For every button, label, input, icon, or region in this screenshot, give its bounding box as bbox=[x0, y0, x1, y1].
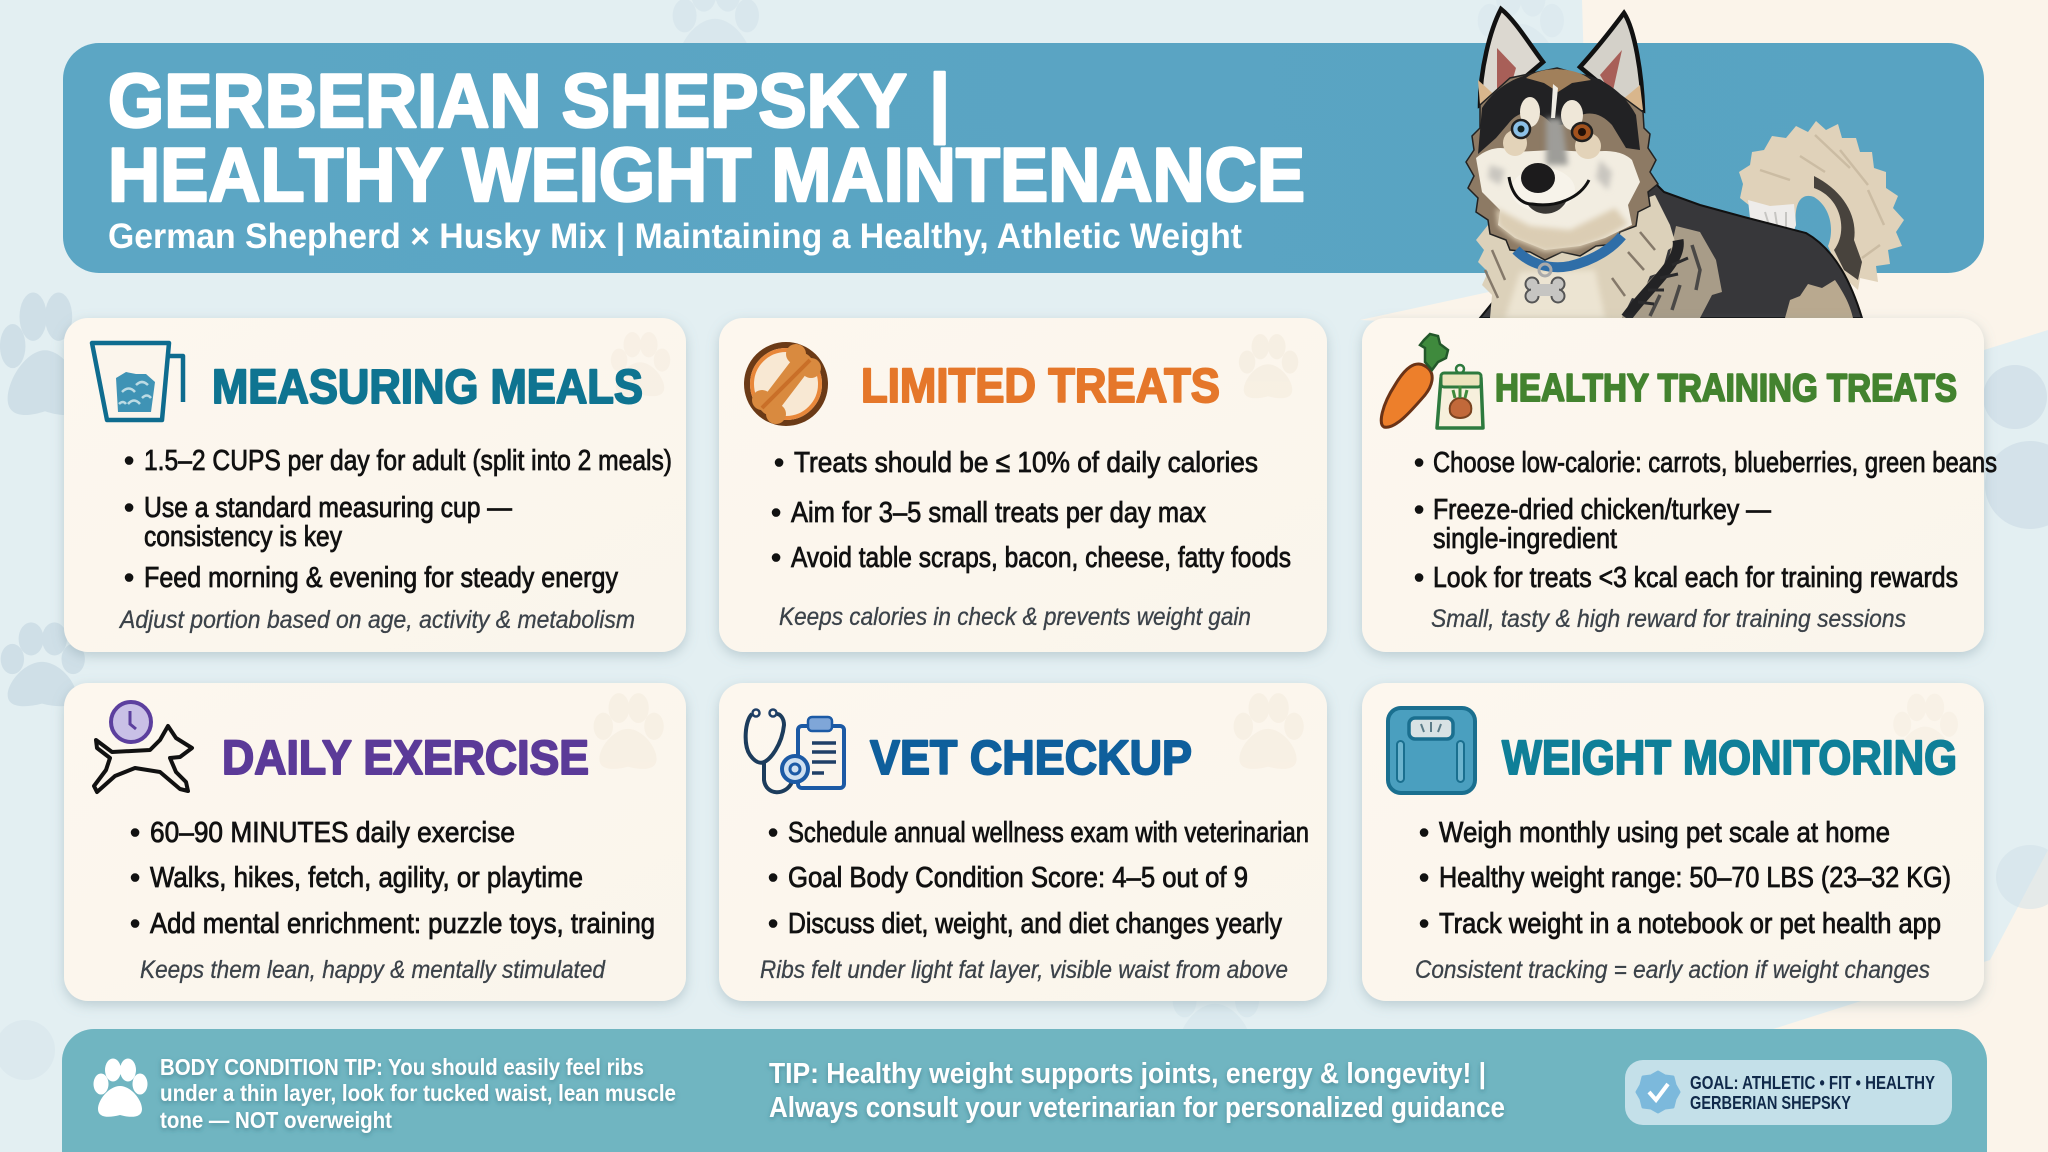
note: Ribs felt under light fat layer, visible waist from above bbox=[760, 956, 1288, 984]
bullet list: 60–90 MINUTES daily exercise bbox=[150, 817, 515, 849]
bullet list: • bbox=[1414, 447, 1424, 479]
bullet list bbox=[768, 817, 1309, 940]
bullet list: • bbox=[774, 447, 784, 479]
bullet list: Avoid table scraps, bacon, cheese, fatty foods bbox=[791, 542, 1291, 574]
note: Small, tasty & high reward for training sessions bbox=[1431, 605, 1906, 633]
bullet list: • bbox=[768, 908, 778, 940]
bullet list bbox=[771, 447, 1291, 574]
bullet list bbox=[1419, 817, 1951, 940]
body condition tip bbox=[160, 1054, 676, 1133]
bullet list: Track weight in a notebook or pet health app bbox=[1439, 908, 1941, 940]
icon: measuring cup bbox=[92, 343, 183, 420]
bullet list: Aim for 3–5 small treats per day max bbox=[791, 497, 1206, 529]
icon: white paw bbox=[94, 1058, 148, 1117]
heading: WEIGHT MONITORING bbox=[1502, 732, 1957, 785]
body condition tip: under a thin layer, look for tucked waist, lean muscle bbox=[160, 1080, 676, 1106]
subtitle: German Shepherd × Husky Mix | Maintaining a Healthy, Athletic Weight bbox=[108, 217, 1242, 256]
bullet list: • bbox=[1414, 562, 1424, 594]
bullet list bbox=[124, 445, 672, 594]
bullet list: • bbox=[1414, 494, 1424, 526]
main title: HEALTHY WEIGHT MAINTENANCE bbox=[108, 133, 1305, 218]
collar and tag bbox=[1516, 236, 1622, 302]
body condition tip: tone — NOT overweight bbox=[160, 1107, 392, 1133]
bullet list: Walks, hikes, fetch, agility, or playtime bbox=[150, 862, 583, 894]
bullet list: • bbox=[124, 492, 134, 524]
bullet list: • bbox=[1419, 908, 1429, 940]
icon: check seal bbox=[1637, 1072, 1679, 1112]
note: Keeps them lean, happy & mentally stimulated bbox=[140, 956, 606, 984]
muzzle bbox=[1511, 168, 1575, 212]
heading: HEALTHY TRAINING TREATS bbox=[1495, 367, 1957, 410]
panel: healthy training treats bbox=[1362, 318, 1997, 652]
bullet list: Discuss diet, weight, and diet changes yearly bbox=[788, 908, 1282, 940]
icon: carrot and treat bag bbox=[1381, 334, 1483, 428]
bullet list: Treats should be ≤ 10% of daily calories bbox=[794, 447, 1258, 479]
main tip: TIP: Healthy weight supports joints, energy & longevity! | bbox=[769, 1058, 1486, 1090]
bullet list: Feed morning & evening for steady energy bbox=[144, 562, 618, 594]
bullet list: Healthy weight range: 50–70 LBS (23–32 KG) bbox=[1439, 862, 1951, 894]
note: Consistent tracking = early action if weight changes bbox=[1415, 956, 1930, 984]
ears bbox=[1478, 9, 1643, 112]
nose bbox=[1521, 163, 1555, 193]
main tip: Always consult your veterinarian for personalized guidance bbox=[769, 1092, 1505, 1124]
tail bbox=[1739, 121, 1904, 290]
main title: GERBERIAN SHEPSKY bbox=[108, 59, 907, 144]
bullet list bbox=[1414, 447, 1997, 594]
bullet list: • bbox=[130, 862, 140, 894]
bullet list: • bbox=[771, 542, 781, 574]
heading: MEASURING MEALS bbox=[212, 361, 643, 414]
chest ruff bbox=[1476, 195, 1688, 318]
bullet list: • bbox=[130, 817, 140, 849]
panel: weight monitoring bbox=[1362, 683, 1984, 1001]
bullet list: Look for treats <3 kcal each for training rewards bbox=[1433, 562, 1958, 594]
dog illustration bbox=[1466, 9, 1904, 318]
icon: crossed-out treat bbox=[747, 344, 825, 424]
header banner bbox=[63, 43, 1984, 273]
bullet list: • bbox=[124, 445, 134, 477]
eye: blue bbox=[1512, 120, 1530, 138]
bullet list: Use a standard measuring cup — bbox=[144, 492, 512, 524]
main title bbox=[108, 59, 1305, 218]
footer banner bbox=[62, 1029, 1987, 1152]
head bbox=[1466, 68, 1658, 260]
bullet list: Schedule annual wellness exam with veterinarian bbox=[788, 817, 1309, 849]
eye: brown bbox=[1572, 123, 1592, 141]
bullet list: • bbox=[768, 862, 778, 894]
bullet list: Weigh monthly using pet scale at home bbox=[1439, 817, 1890, 849]
bullet list: single-ingredient bbox=[1433, 523, 1617, 555]
bullet list: 1.5–2 CUPS per day for adult (split into 2 meals) bbox=[144, 445, 672, 477]
bullet list: • bbox=[768, 817, 778, 849]
note: Adjust portion based on age, activity & metabolism bbox=[118, 606, 635, 634]
bullet list: • bbox=[1419, 817, 1429, 849]
panel: limited treats bbox=[719, 318, 1327, 652]
body condition tip: BODY CONDITION TIP: You should easily feel ribs bbox=[160, 1054, 644, 1080]
bullet list: • bbox=[1419, 862, 1429, 894]
main title: | bbox=[929, 59, 950, 145]
bullet list bbox=[130, 817, 655, 940]
panel: measuring meals bbox=[64, 318, 686, 652]
main tip bbox=[769, 1058, 1505, 1124]
heading: VET CHECKUP bbox=[870, 732, 1192, 785]
heading: DAILY EXERCISE bbox=[222, 732, 589, 785]
bullet list: • bbox=[130, 908, 140, 940]
goal badge: GOAL: ATHLETIC • FIT • HEALTHY bbox=[1690, 1072, 1936, 1093]
icon: stethoscope and clipboard bbox=[746, 710, 844, 792]
bullet list: consistency is key bbox=[144, 521, 342, 553]
body bbox=[1480, 170, 1862, 318]
bullet list: Freeze-dried chicken/turkey — bbox=[1433, 494, 1771, 526]
icon: weighing scale bbox=[1388, 708, 1475, 793]
panel: vet checkup bbox=[719, 683, 1327, 1001]
bullet list: • bbox=[124, 562, 134, 594]
note: Keeps calories in check & prevents weight gain bbox=[779, 603, 1251, 631]
goal badge bbox=[1625, 1060, 1952, 1125]
heading: LIMITED TREATS bbox=[861, 360, 1220, 413]
goal badge: GERBERIAN SHEPSKY bbox=[1690, 1092, 1852, 1113]
bullet list: Add mental enrichment: puzzle toys, training bbox=[150, 908, 655, 940]
bullet list: • bbox=[771, 497, 781, 529]
icon: running dog with clock bbox=[94, 702, 192, 792]
bullet list: Goal Body Condition Score: 4–5 out of 9 bbox=[788, 862, 1248, 894]
panel: daily exercise bbox=[64, 683, 686, 1001]
